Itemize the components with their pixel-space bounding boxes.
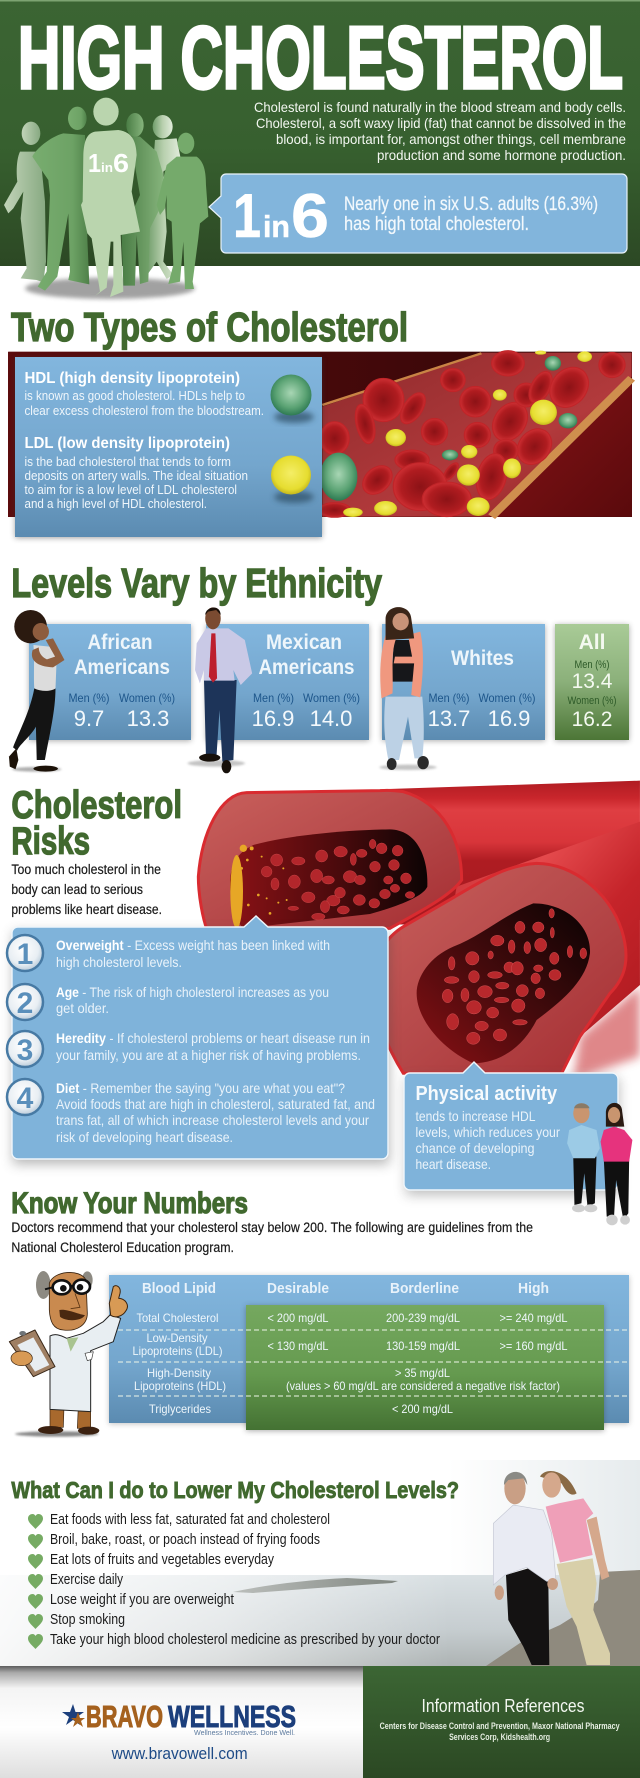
panel: footer logo [0, 1666, 364, 1778]
panel: African Americans: 13.3 [127, 706, 169, 731]
table: blood lipid guidelines [109, 1275, 629, 1431]
panel: Whites: Men (%) [428, 691, 470, 705]
icon: doctor cartoon [9, 1271, 127, 1437]
panel: physical activity: levels, which reduces your [416, 1124, 560, 1140]
panel: physical activity [404, 1062, 619, 1195]
item 3: your family, you are at a higher risk of having problems. [56, 1047, 361, 1063]
row: total cholesterol [136, 1311, 568, 1325]
row: total cholesterol: < 200 mg/dL [268, 1311, 329, 1325]
text block: LDL [24, 435, 248, 511]
icon: HDL green ball [270, 374, 314, 423]
item 4: trans fat, all of which increase cholesterol levels and your [56, 1112, 369, 1128]
heading: cholesterol risks: Risks [11, 820, 90, 863]
panel: Whites: 16.9 [488, 706, 530, 731]
text block: intro: blood, is important for, amongst other things, cell membrane [276, 131, 626, 147]
logo wordmark: WELLNESS [168, 1699, 296, 1734]
item 1: Overweight - Excess weight has been linked with [56, 937, 330, 953]
text block: risks intro: Too much cholesterol in the [11, 862, 161, 877]
big stat [233, 182, 329, 251]
panel: Mexican Americans: 14.0 [310, 706, 352, 731]
row: LDL [132, 1331, 568, 1358]
text block: guidelines intro [11, 1220, 533, 1255]
icon: exercising couple [567, 1103, 632, 1225]
panel: African Americans [29, 624, 191, 741]
row: LDL: >= 160 mg/dL [500, 1339, 568, 1353]
icon: logo stars [62, 1704, 85, 1727]
panel: Mexican Americans: Americans [258, 656, 354, 679]
item 1 [7, 935, 330, 971]
text block: risks intro [11, 862, 162, 917]
tip 7: Take your high blood cholesterol medicine as prescribed by your doctor [50, 1632, 440, 1648]
panel: Whites: 13.7 [428, 706, 470, 731]
table header: High [518, 1280, 549, 1297]
text block: guidelines intro: National Cholesterol Education program. [11, 1240, 234, 1255]
text block: LDL: deposits on artery walls. The ideal situation [24, 469, 248, 483]
text block: HDL: HDL (high density lipoprotein) [24, 370, 240, 387]
panel: Mexican Americans: Mexican [266, 631, 342, 654]
icon: man with red tie [188, 607, 252, 773]
tip 5: Lose weight if you are overweight [50, 1592, 234, 1608]
tip 6 [28, 1612, 125, 1629]
text block: intro [254, 99, 626, 163]
row: LDL: Low-Density [146, 1331, 208, 1345]
item 2: 2 [17, 987, 33, 1020]
text block: LDL: is the bad cholesterol that tends to form [24, 455, 231, 469]
item 2 [7, 984, 329, 1020]
text block: risks intro: body can lead to serious [11, 882, 143, 897]
text: 1 in 6 on figure: 1 [88, 148, 101, 178]
panel: Whites [382, 624, 545, 741]
heading: what can I do: What Can I do to Lower My Cholesterol Levels? [11, 1477, 459, 1503]
text: 1 in 6 on figure [88, 148, 129, 178]
heading: two types: Two Types of Cholesterol [11, 304, 408, 350]
row: HDL: > 35 mg/dL [395, 1366, 450, 1380]
tip 4 [28, 1572, 124, 1589]
row: HDL: Lipoproteins (HDL) [134, 1379, 226, 1393]
logo tagline: Wellness Incentives. Done Well. [194, 1730, 295, 1737]
callout: 1 in 6 stat [209, 174, 627, 253]
row: triglycerides: < 200 mg/dL [392, 1402, 453, 1416]
illustration: blood vessel [8, 351, 632, 517]
text: 1 in 6 on figure: 6 [113, 148, 129, 178]
text block: intro: production and some hormone production. [377, 147, 626, 163]
row: triglycerides [149, 1402, 453, 1416]
table header: Desirable [267, 1280, 329, 1297]
panel: information references: Information References [422, 1696, 584, 1716]
text block: LDL: to aim for is a low level of LDL cholesterol [24, 483, 237, 497]
panel: Whites: Women (%) [478, 691, 536, 705]
panel: physical activity: Physical activity [416, 1083, 558, 1105]
item 4: 4 [17, 1082, 34, 1115]
panel: All: 13.4 [572, 670, 613, 693]
panel: physical activity: tends to increase HDL [416, 1108, 536, 1124]
item 4: risk of developing heart disease. [56, 1129, 233, 1145]
text block: LDL: LDL (low density lipoprotein) [24, 435, 230, 452]
row: HDL: High-Density [147, 1366, 211, 1380]
row: LDL: 130-159 mg/dL [386, 1339, 460, 1353]
logo wordmark: BRAVO [86, 1699, 163, 1734]
tip 3: Eat lots of fruits and vegetables everyday [50, 1552, 275, 1568]
panel: risk list [7, 916, 389, 1164]
text block: guidelines intro: Doctors recommend that your cholesterol stay below 200. The following are guidelines from the [11, 1220, 533, 1235]
item 4 [7, 1079, 375, 1145]
icon: woman in coral cardigan [379, 607, 437, 770]
panel: All [555, 624, 629, 741]
big stat: 6 [291, 182, 329, 251]
heading: cholesterol risks: Cholesterol [11, 784, 182, 827]
tip 1: Eat foods with less fat, saturated fat and cholesterol [50, 1512, 330, 1528]
panel: header band [0, 0, 640, 266]
list: lifestyle tips [28, 1512, 440, 1649]
item 3: 3 [17, 1034, 33, 1067]
heading: ethnicity: Levels Vary by Ethnicity [11, 560, 382, 606]
panel: physical activity: chance of developing [416, 1140, 534, 1156]
panel: information references [363, 1666, 640, 1778]
heading: know your numbers: Know Your Numbers [11, 1187, 248, 1220]
text block: HDL [24, 370, 264, 418]
panel: Mexican Americans: 16.9 [252, 706, 294, 731]
table header: Blood Lipid [142, 1280, 216, 1297]
illustration: arteries [198, 781, 640, 1080]
big stat: 1 [233, 182, 261, 251]
panel: Mexican Americans: Men (%) [253, 691, 294, 705]
panel: All: All [579, 631, 605, 654]
panel: African Americans: Women (%) [119, 691, 175, 705]
row: total cholesterol: Total Cholesterol [136, 1311, 218, 1325]
panel: physical activity: heart disease. [416, 1156, 491, 1172]
text: 1 in 6 on figure: in [101, 160, 113, 175]
heading: cholesterol risks [11, 784, 182, 863]
item 1: 1 [17, 938, 33, 971]
panel: African Americans: 9.7 [74, 706, 104, 731]
text block: HDL: clear excess cholesterol from the bloodstream. [24, 404, 264, 418]
row: total cholesterol: >= 240 mg/dL [500, 1311, 568, 1325]
row: total cholesterol: 200-239 mg/dL [386, 1311, 460, 1325]
item 3: Heredity - If cholesterol problems or heart disease run in [56, 1030, 370, 1046]
text block: risks intro: problems like heart disease. [11, 902, 162, 917]
illustration: beach photo [0, 1460, 640, 1666]
text block: HDL: is known as good cholesterol. HDLs help to [24, 389, 245, 403]
panel: HDL and LDL [15, 357, 322, 538]
row: HDL: (values > 60 mg/dL are considered a negative risk factor) [286, 1379, 560, 1393]
website: www.bravowell.com [111, 1744, 248, 1763]
tip 6: Stop smoking [50, 1612, 125, 1628]
logo wordmark [86, 1699, 296, 1734]
panel: Mexican Americans [206, 624, 369, 741]
stat text [344, 194, 598, 235]
table header: Borderline [390, 1280, 459, 1297]
row: HDL [134, 1366, 560, 1393]
panel: African Americans: Americans [74, 656, 170, 679]
icon: group of silhouettes with 1 in 6 [4, 98, 208, 299]
panel: All: 16.2 [572, 708, 612, 731]
row: triglycerides: Triglycerides [149, 1402, 211, 1416]
item 4: Avoid foods that are high in cholesterol, saturated fat, and [56, 1096, 375, 1112]
table header [142, 1280, 549, 1297]
panel: All: Women (%) [568, 695, 616, 707]
panel: African Americans: African [88, 631, 152, 654]
big stat: in [263, 209, 290, 244]
item 4: Diet - Remember the saying "you are what you eat"? [56, 1080, 345, 1096]
icon: LDL yellow ball [271, 456, 314, 503]
photo: couple walking [493, 1471, 610, 1665]
item 2: get older. [56, 1000, 109, 1016]
text block: LDL: and a high level of HDL cholesterol. [24, 497, 207, 511]
item 3 [7, 1030, 370, 1067]
tip 2: Broil, bake, roast, or poach instead of frying foods [50, 1532, 320, 1548]
icon: woman with curly hair [9, 610, 64, 772]
panel: Mexican Americans: Women (%) [303, 691, 360, 705]
row: LDL: < 130 mg/dL [268, 1339, 329, 1353]
tip 4: Exercise daily [50, 1572, 124, 1588]
panel: information references: Services Corp, Kidshealth.org [449, 1732, 550, 1742]
panel: All: Men (%) [574, 659, 610, 671]
stat text: has high total cholesterol. [344, 214, 529, 235]
panel: African Americans: Men (%) [68, 691, 110, 705]
row: LDL: Lipoproteins (LDL) [132, 1344, 223, 1358]
item 1: high cholesterol levels. [56, 954, 182, 970]
item 2: Age - The risk of high cholesterol increases as you [56, 984, 329, 1000]
panel: Whites: Whites [451, 647, 514, 670]
